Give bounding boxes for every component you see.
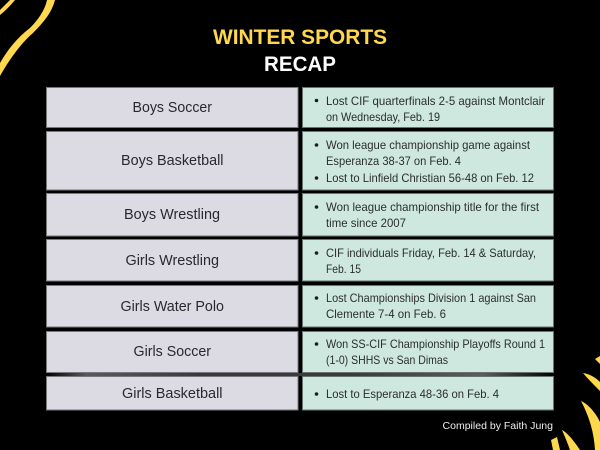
row: Girls Soccer [46,332,554,372]
row: Boys Soccer: Lost CIF quarterfinals 2-5 against Montclair [326,94,545,108]
row: Boys Basketball: Won league championship game against [326,138,531,152]
row: Boys Soccer [46,88,554,128]
row: Boys Soccer: on Wednesday, Feb. 19 [326,110,440,124]
row: Boys Wrestling: Boys Wrestling [124,207,220,223]
row: Boys Basketball [46,132,554,190]
row: Boys Basketball: Lost to Linfield Christian 56-48 on Feb. 12 [326,171,534,185]
row: Boys Wrestling [46,194,554,236]
row: Girls Wrestling: CIF individuals Friday, Feb. 14 & Saturday, [326,246,536,260]
title: WINTER SPORTS [213,25,387,49]
row: Girls Wrestling [46,240,554,281]
row: Girls Soccer: Girls Soccer [134,344,211,360]
row: Girls Basketball [46,376,554,410]
title: RECAP [264,52,336,76]
row: Girls Water Polo: Clemente 7-4 on Feb. 6 [326,307,446,321]
row: Boys Soccer: Boys Soccer [132,100,212,116]
decoration: top-left yellow swirl [0,0,55,76]
row: Girls Wrestling: Feb. 15 [326,262,361,276]
row: Boys Basketball: Boys Basketball [121,153,224,169]
row: Girls Water Polo [46,286,554,327]
glow line between rows [46,373,554,376]
row: Girls Basketball: Girls Basketball [122,386,222,402]
row: Girls Water Polo: Lost Championships Division 1 against San [326,291,536,305]
decoration: bottom-right yellow rays [551,356,600,450]
row: Girls Wrestling: Girls Wrestling [126,253,219,269]
row: Boys Wrestling: time since 2007 [326,216,406,230]
row: Boys Wrestling: Won league championship title for the first [326,200,540,214]
row: Girls Basketball: Lost to Esperanza 48-36 on Feb. 4 [326,387,499,401]
credit line: Compiled by Faith Jung [442,421,553,432]
row: Boys Basketball: Esperanza 38-37 on Feb. 4 [326,154,461,168]
row: Girls Soccer: Won SS-CIF Championship Playoffs Round 1 [326,337,545,351]
row: Girls Water Polo: Girls Water Polo [120,299,224,315]
row: Girls Soccer: (1-0) SHHS vs San Dimas [326,353,448,367]
title [213,25,387,76]
